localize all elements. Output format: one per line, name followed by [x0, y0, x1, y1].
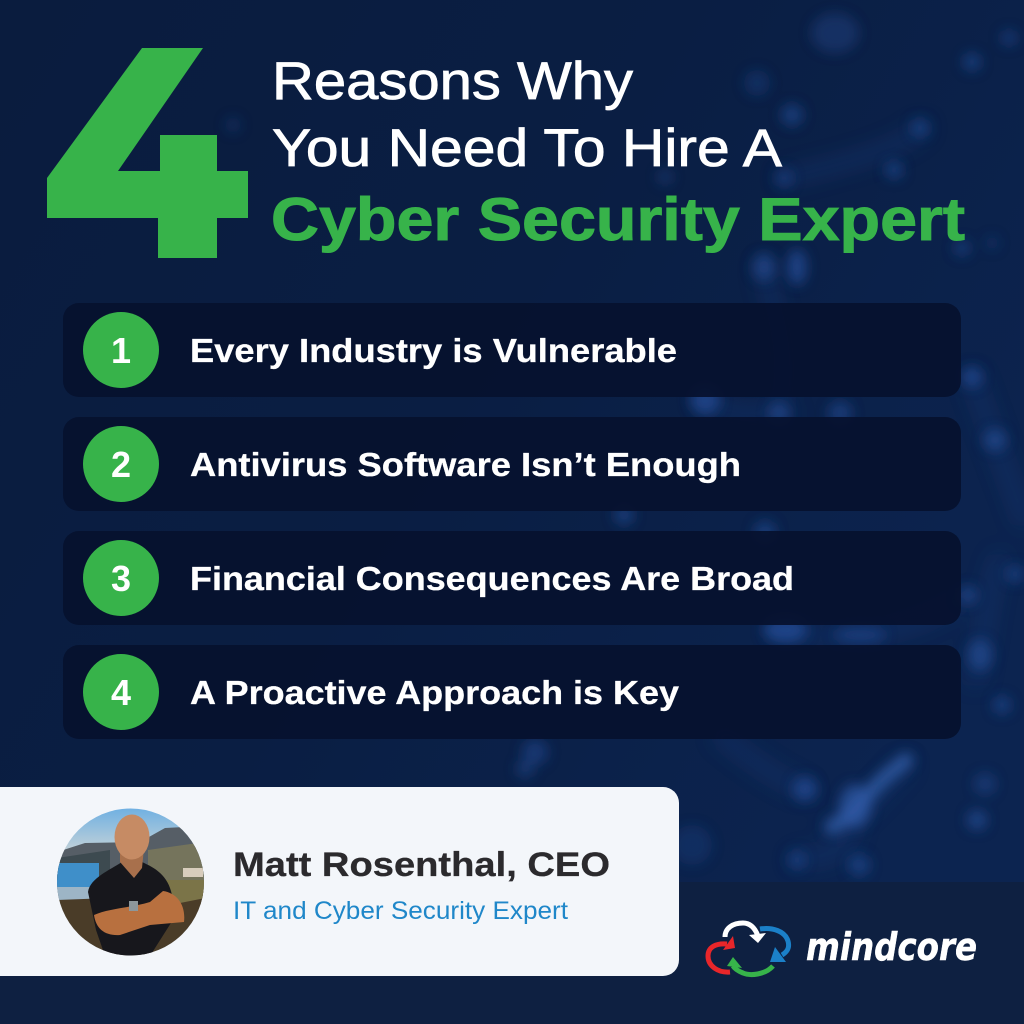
reason text 3: Financial Consequences Are Broad — [190, 560, 794, 597]
number badge 4: 4 — [111, 672, 131, 713]
heading line 1: Reasons Why — [272, 52, 634, 111]
panel: reason 3 — [63, 531, 961, 625]
author photo — [57, 808, 205, 956]
bright network strand — [832, 760, 906, 828]
reason text 2: Antivirus Software Isn’t Enough — [190, 446, 741, 483]
title big number 4 — [47, 48, 248, 258]
heading — [271, 52, 965, 253]
bottom strip — [0, 882, 1024, 1024]
author role: IT and Cyber Security Expert — [233, 897, 568, 925]
logo: mindcore — [708, 923, 977, 975]
panel: reason 1 — [63, 303, 961, 397]
heading line 3: Cyber Security Expert — [271, 186, 965, 253]
reason text 4: A Proactive Approach is Key — [190, 674, 680, 711]
icon: cloud of arrows — [708, 923, 789, 975]
number badge 4 — [83, 654, 159, 730]
number badge 3 — [83, 540, 159, 616]
number badge 1 — [83, 312, 159, 388]
panel: reason 4 — [63, 645, 961, 739]
panel: reason 2 — [63, 417, 961, 511]
number badge 3: 3 — [111, 558, 131, 599]
reason text 1: Every Industry is Vulnerable — [190, 332, 677, 369]
number badge 2 — [83, 426, 159, 502]
logo wordmark: mindcore — [806, 925, 977, 969]
heading line 2: You Need To Hire A — [272, 119, 783, 178]
author name: Matt Rosenthal, CEO — [233, 846, 610, 884]
number badge 1: 1 — [111, 330, 131, 371]
panel: author card — [0, 787, 679, 976]
number badge 2: 2 — [111, 444, 131, 485]
